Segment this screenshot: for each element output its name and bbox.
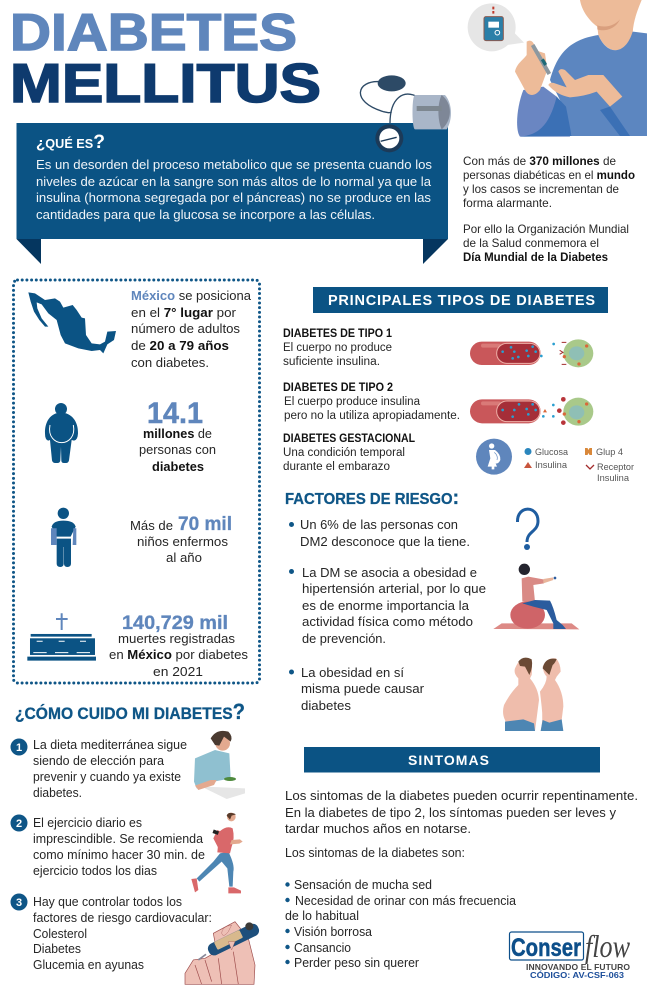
text: mexico ranking: con diabetes.	[131, 356, 209, 370]
step 1: diabetes.	[33, 786, 82, 800]
step 3: Glucemia en ayunas	[33, 958, 144, 972]
list: symptoms	[285, 878, 516, 970]
text: symptoms intro: tardar muchos años en notarse.	[285, 822, 471, 836]
text: gestacional: Una condición temporal	[283, 447, 405, 459]
text: mexico ranking	[131, 289, 251, 370]
panel: que es ribbon	[16, 123, 448, 264]
illustration: runner	[191, 813, 243, 893]
definition text	[36, 157, 433, 222]
logo: conserflow: CÓDIGO: AV-CSF-063	[530, 969, 624, 980]
banner	[313, 287, 608, 313]
heading: ¿CÓMO CUIDO MI DIABETES?	[15, 699, 245, 724]
icon: coffin with cross	[27, 613, 96, 661]
panel: sintomas	[285, 747, 638, 970]
text: symptoms intro	[285, 789, 638, 860]
legend: Glup 4	[596, 447, 623, 458]
text: symptoms intro: Los sintomas de la diabetes son:	[285, 846, 465, 860]
text: tipo 2: DIABETES DE TIPO 2	[283, 382, 393, 394]
step 2: ejercicio todos los dias	[33, 864, 157, 878]
step 2	[10, 814, 205, 878]
text: world statistics	[463, 154, 635, 264]
legend: Receptor	[597, 462, 634, 473]
stat: 14.1 million	[139, 397, 216, 474]
banner	[304, 747, 600, 772]
bullet: obesity and hypertension: La DM se asocia a obesidad e	[302, 566, 477, 580]
text: symptoms intro: En la diabetes de tipo 2, los síntomas pueden ser leves y	[285, 806, 617, 820]
banner: SINTOMAS	[408, 752, 489, 768]
title: MELLITUS	[10, 52, 321, 114]
step 3: Diabetes	[33, 942, 81, 956]
text: mexico ranking: de 20 a 79 años	[131, 339, 229, 353]
text: gestacional: durante el embarazo	[283, 461, 390, 473]
stat: deaths in 2021: en 2021	[153, 665, 203, 679]
step 2: como mínimo hacer 30 min. de	[33, 848, 205, 862]
list: symptoms: de lo habitual	[285, 909, 359, 923]
icon: map of mexico	[28, 292, 116, 353]
panel: mexico statistics	[14, 280, 260, 683]
text: world statistics: Por ello la Organización Mundial	[463, 222, 629, 236]
step 3: 3	[16, 897, 22, 909]
text: mexico ranking: México se posiciona	[131, 289, 251, 303]
ribbon tail left	[16, 239, 41, 264]
legend: Glucosa	[535, 447, 569, 458]
bullet: 6 percent	[289, 518, 470, 549]
text: tipo 1: suficiente insulina.	[283, 356, 380, 368]
illustration: person checking blood glucose	[468, 0, 647, 137]
step 2: 2	[16, 818, 22, 830]
icon: obese person	[45, 403, 78, 463]
stat: deaths in 2021: muertes registradas	[118, 632, 235, 646]
stat: 70 mil children: Más de	[130, 519, 173, 533]
list: symptoms: Cansancio	[294, 941, 351, 955]
bullet: obesity and hypertension: es de enorme importancia la	[302, 599, 469, 613]
text: mexico ranking: número de adultos	[131, 322, 240, 336]
bullet: obesity: La obesidad en sí	[301, 666, 405, 680]
stat: 14.1 million: millones de	[143, 427, 212, 441]
illustration: woman exercising on ball	[493, 564, 579, 629]
panel: factores de riesgo	[285, 487, 579, 731]
logo: conserflow	[510, 928, 631, 980]
panel: principales tipos de diabetes	[283, 287, 634, 484]
bullet: 6 percent: DM2 desconoce que la tiene.	[300, 535, 470, 549]
legend: Insulina	[535, 460, 568, 471]
legend	[524, 447, 634, 484]
stat: deaths in 2021	[109, 613, 248, 679]
step 2: El ejercicio diario es	[33, 816, 142, 830]
text: world statistics: personas diabéticas en el mundo	[463, 168, 635, 182]
icon: pregnant woman	[476, 439, 512, 475]
step 3: Colesterol	[33, 927, 87, 941]
step 1: prevenir y cuando ya existe	[33, 770, 181, 784]
illustration: vessel and cell type 2	[470, 397, 593, 426]
stat: 70 mil children: niños enfermos	[137, 535, 228, 549]
heading: FACTORES DE RIESGO:	[285, 487, 459, 509]
definition text: insulina (hormona segregada por el páncreas) no se produce en las	[36, 190, 431, 205]
text: world statistics: Con más de 370 millones de	[463, 154, 616, 168]
text: world statistics: de la Salud conmemora el	[463, 236, 599, 250]
text: gestacional	[283, 431, 415, 473]
illustration: hands with glucometer	[185, 922, 261, 984]
stat: deaths in 2021: en México por diabetes	[109, 648, 248, 662]
stat: 14.1 million: personas con	[139, 443, 216, 457]
bullet: 6 percent: Un 6% de las personas con	[300, 518, 458, 532]
ribbon tail right	[423, 239, 448, 264]
step 3	[10, 894, 212, 972]
text: tipo 2: pero no la utiliza apropiadamente.	[284, 410, 460, 422]
stat: 14.1 million: 14.1	[147, 397, 203, 430]
text: world statistics: forma alarmante.	[463, 196, 552, 210]
bullet: obesity and hypertension	[289, 566, 486, 646]
icon: child	[51, 508, 76, 567]
text: world statistics: y los casos se incrementan de	[463, 182, 619, 196]
illustration: man eating salad	[194, 731, 245, 799]
step 1: siendo de elección para	[33, 754, 164, 768]
illustration: vessel and cell type 1	[470, 339, 593, 367]
bullet: obesity and hypertension: actividad física como método	[302, 615, 473, 629]
stat: deaths in 2021: 140,729 mil	[122, 613, 228, 634]
list: symptoms: Visión borrosa	[294, 925, 372, 939]
list: symptoms: Perder peso sin querer	[294, 956, 419, 970]
title: DIABETES	[10, 4, 297, 62]
text: tipo 2: El cuerpo produce insulina	[284, 396, 421, 408]
bullet: obesity and hypertension: de prevención.	[302, 632, 386, 646]
text: symptoms intro: Los sintomas de la diabetes pueden ocurrir repentinamente.	[285, 789, 638, 803]
text: world statistics: Día Mundial de la Diabetes	[463, 250, 608, 264]
step 3: factores de riesgo cardiovacular:	[33, 911, 212, 925]
definition text: niveles de azúcar en la sangre son más altos de lo normal ya que la	[36, 174, 432, 189]
stat: 14.1 million: diabetes	[152, 460, 204, 474]
text: tipo 2	[283, 382, 460, 422]
heading que es: ¿QUÉ ES?	[36, 132, 105, 153]
text: tipo 1: DIABETES DE TIPO 1	[283, 328, 393, 340]
logo: conserflow: Conser	[511, 934, 581, 962]
step 1	[10, 738, 187, 800]
logo: conserflow: INNOVANDO EL FUTURO	[526, 962, 630, 972]
bullet: obesity: diabetes	[301, 699, 351, 713]
text: tipo 1	[283, 328, 393, 368]
illustration: blood pressure monitor	[360, 75, 451, 152]
definition text: cantidades para que la glucosa se incorpore a las células.	[36, 207, 375, 222]
step 1: 1	[16, 742, 22, 754]
banner: PRINCIPALES TIPOS DE DIABETES	[328, 293, 595, 309]
stat: 70 mil children: 70 mil	[178, 514, 232, 535]
step 2: imprescindible. Se recomienda	[33, 832, 203, 846]
bullet: obesity	[289, 666, 424, 713]
stat: 70 mil children	[130, 514, 232, 565]
list: symptoms: Necesidad de orinar con más frecuencia	[295, 894, 516, 908]
text: tipo 1: El cuerpo no produce	[283, 342, 392, 354]
title	[10, 4, 321, 114]
text: gestacional: DIABETES GESTACIONAL	[283, 431, 415, 445]
panel: como cuido mi diabetes	[10, 699, 261, 984]
stat: 70 mil children: al año	[166, 551, 202, 565]
icon: question mark	[517, 509, 538, 550]
ribbon body	[16, 123, 448, 239]
legend: Insulina	[597, 473, 630, 484]
bullet: obesity and hypertension: hipertensión arterial, por lo que	[302, 582, 486, 596]
definition text: Es un desorden del proceso metabolico que se presenta cuando los	[36, 157, 433, 172]
logo: conserflow: flow	[585, 928, 631, 964]
step 1: La dieta mediterránea sigue	[33, 738, 187, 752]
illustration: men in profile	[503, 658, 563, 731]
text: mexico ranking: en el 7° lugar por	[131, 306, 236, 320]
list: symptoms: Sensación de mucha sed	[294, 878, 432, 892]
step 3: Hay que controlar todos los	[33, 895, 182, 909]
bullet: obesity: misma puede causar	[301, 682, 424, 696]
